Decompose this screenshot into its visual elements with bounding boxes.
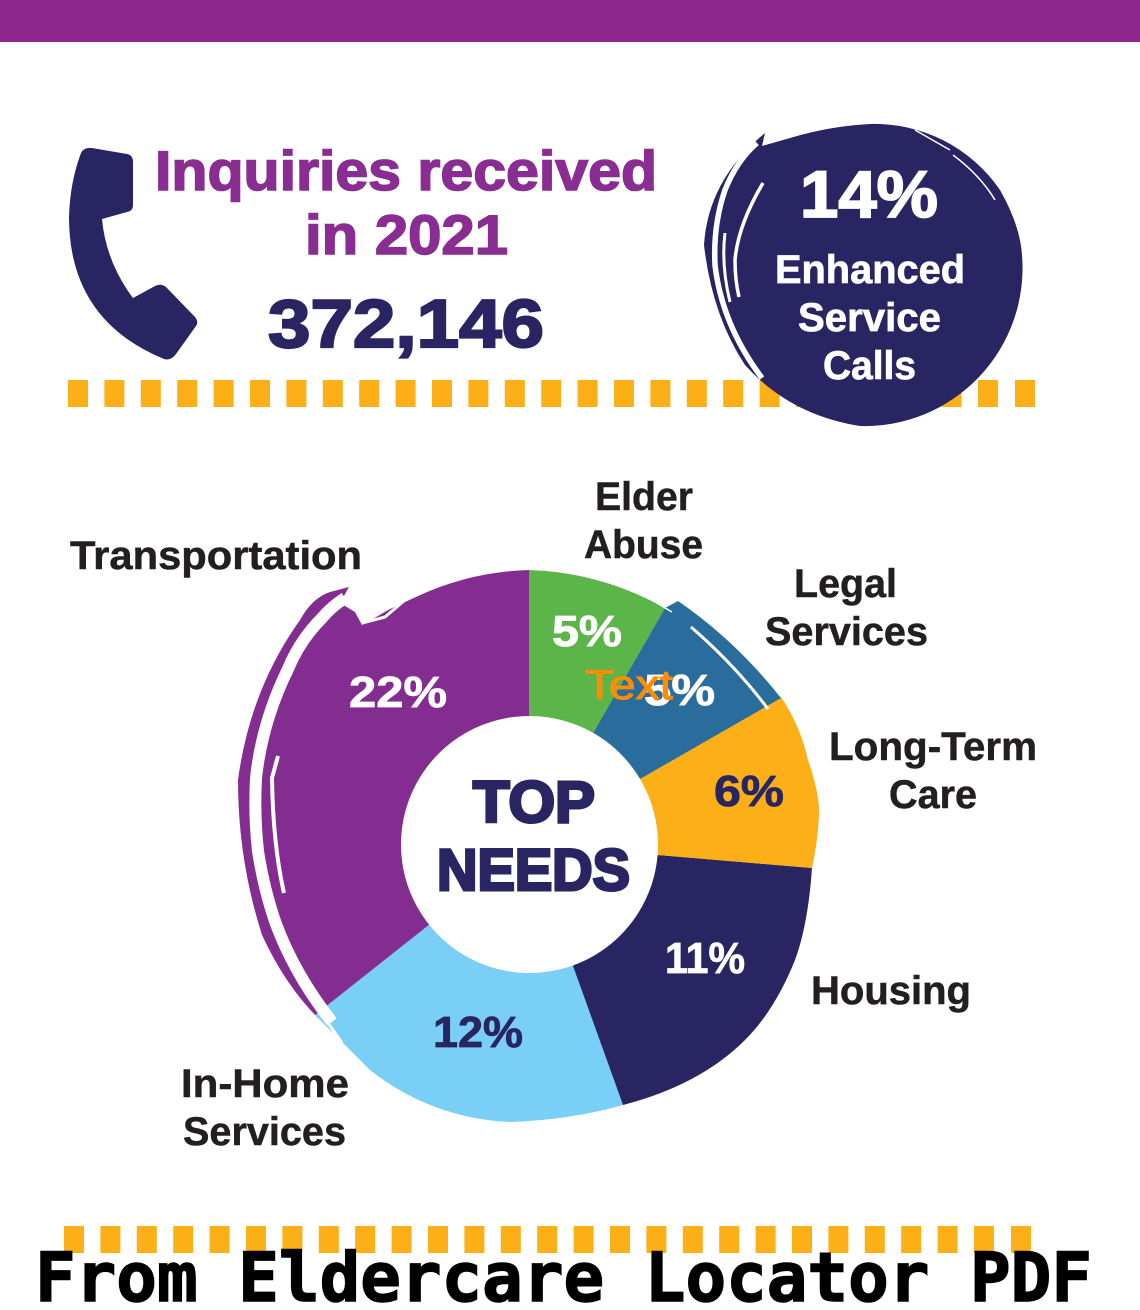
chart category labels: Abuse: [584, 523, 703, 567]
slice: legal services: [593, 601, 781, 779]
slice: housing: [573, 855, 812, 1105]
donut chart: top needs: [238, 570, 819, 1122]
badge percentage: 14%: [800, 157, 938, 231]
slice: long-term care: [640, 697, 819, 868]
donut hole: [401, 716, 658, 973]
placeholder text overlay: Text: [585, 661, 673, 708]
slice values: 5%: [552, 607, 622, 656]
chart category labels: In-Home: [181, 1062, 349, 1106]
slice: transportation: [238, 570, 529, 1018]
heading: inquiries received: in 2021: [305, 203, 508, 266]
chart category labels: Transportation: [70, 534, 362, 578]
slice values: 12%: [433, 1008, 523, 1057]
badge caption: Calls: [823, 344, 916, 388]
heading: inquiries received: [155, 139, 657, 266]
donut centre title: TOP: [473, 770, 595, 835]
slice values: 11%: [665, 934, 745, 983]
badge caption: Service: [798, 296, 941, 340]
total inquiries number: 372,146: [268, 286, 544, 362]
brush highlights: [715, 130, 995, 378]
brush blob background: [704, 124, 1023, 426]
donut centre title: [437, 770, 630, 903]
heading: inquiries received: Inquiries received: [155, 139, 657, 202]
donut centre title: NEEDS: [437, 838, 630, 903]
divider: lower dashed line: [64, 1226, 1031, 1253]
top banner: [0, 0, 1140, 42]
callout: enhanced service calls badge: [704, 124, 1023, 426]
icon: telephone handset: [69, 148, 197, 359]
chart category labels: Services: [183, 1110, 346, 1154]
chart category labels: Legal: [794, 562, 897, 606]
slice values: 22%: [349, 668, 447, 717]
slice values: 5%: [644, 666, 715, 715]
slice: elder abuse: [529, 570, 665, 740]
chart category labels: Housing: [811, 969, 971, 1013]
chart category labels: Elder: [595, 475, 693, 519]
badge caption: Enhanced: [775, 248, 965, 292]
brush highlights: [255, 580, 768, 1043]
chart category labels: Services: [765, 610, 928, 654]
slice: in-home services: [315, 924, 623, 1122]
divider: upper dashed line: [68, 380, 1035, 407]
slice values: [349, 607, 784, 1057]
badge caption: [775, 248, 965, 388]
chart category labels: [70, 475, 1037, 1154]
chart category labels: Care: [889, 773, 977, 817]
chart category labels: Long-Term: [829, 725, 1037, 769]
slice values: 6%: [714, 767, 784, 816]
